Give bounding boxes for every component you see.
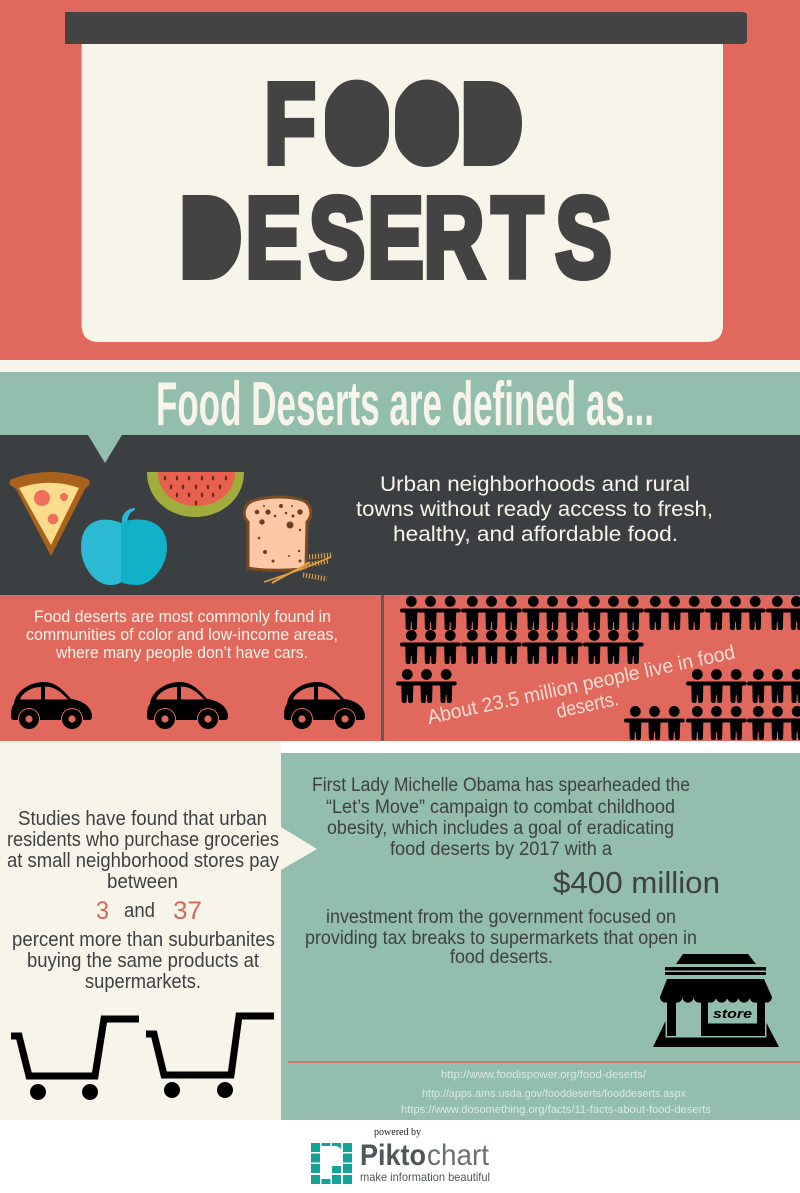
card lid bar <box>65 12 747 44</box>
grocery prices text: Studies have found that urban <box>18 808 267 830</box>
campaign text: First Lady Michelle Obama has spearheaded the <box>312 775 690 796</box>
campaign text: food deserts. <box>450 947 553 968</box>
icon: store <box>653 954 779 1047</box>
number: 37: 37 <box>173 897 202 925</box>
communities text <box>26 607 338 662</box>
icon: three cars <box>11 682 365 730</box>
wordmark <box>360 1139 490 1184</box>
communities text: communities of color and low-income areas, <box>26 625 338 644</box>
panel: people statistic <box>384 595 800 741</box>
grocery prices text: residents who purchase groceries <box>7 829 279 851</box>
icon: Piktochart logo <box>311 1143 352 1184</box>
sources: http://apps.ams.usda.gov/fooddeserts/fooddeserts.aspx <box>422 1088 686 1100</box>
campaign text: obesity, which includes a goal of eradicating <box>327 818 674 839</box>
icon: store: store <box>713 1006 752 1021</box>
panel: header <box>0 0 800 360</box>
wordmark: make information beautiful <box>360 1170 490 1184</box>
grocery prices text: buying the same products at <box>27 950 259 972</box>
definition text <box>356 473 713 546</box>
icon: shopping cart right <box>146 1016 274 1098</box>
panel: grocery prices <box>0 741 281 1120</box>
panel: Let's Move campaign <box>281 753 800 1120</box>
grocery prices text: and <box>124 900 155 922</box>
icon: bread with wheat <box>244 497 333 583</box>
campaign text: investment from the government focused on <box>326 907 676 928</box>
stat: $400 million: $400 million <box>553 865 720 900</box>
icon: apple <box>81 508 167 585</box>
wordmark: Pikto <box>360 1139 426 1172</box>
grocery prices text <box>7 808 279 993</box>
campaign text <box>305 775 697 968</box>
panel: definition <box>0 435 800 595</box>
icon: watermelon <box>147 472 244 517</box>
people statistic text: About 23.5 million people live in food <box>425 642 737 729</box>
sources: https://www.dosomething.org/facts/11-facts-about-food-deserts <box>401 1104 712 1116</box>
campaign text: “Let’s Move” campaign to combat childhood <box>326 797 675 818</box>
number: 3: 3 <box>96 897 109 925</box>
footer: Piktochart branding <box>0 1120 800 1193</box>
communities text: Food deserts are most commonly found in <box>34 607 331 626</box>
title: Food Deserts <box>180 61 611 302</box>
title: Food Deserts: DESERTS <box>180 175 611 302</box>
campaign text: providing tax breaks to supermarkets that open in <box>305 928 697 949</box>
grocery prices text: percent more than suburbanites <box>12 929 275 951</box>
definition text: towns without ready access to fresh, <box>356 498 713 521</box>
grocery prices text: at small neighborhood stores pay <box>7 850 279 872</box>
title: Food Deserts: FOOD <box>264 61 521 188</box>
definition text: Urban neighborhoods and rural <box>380 473 690 496</box>
sources <box>401 1069 712 1116</box>
panel: communities and cars <box>0 595 381 741</box>
communities text: where many people don’t have cars. <box>55 643 308 662</box>
icon: pizza slice <box>9 472 90 556</box>
wordmark: chart <box>427 1139 490 1172</box>
icon: shopping cart left <box>11 1019 139 1100</box>
pointer arrow <box>281 827 317 870</box>
people statistic text: deserts. <box>554 688 621 723</box>
panel: definition banner <box>0 370 800 439</box>
icon: rows of people <box>396 596 800 740</box>
grocery prices text: supermarkets. <box>85 971 201 993</box>
grocery prices text: between <box>107 871 178 893</box>
title card <box>82 40 723 342</box>
sources: http://www.foodispower.org/food-deserts/ <box>441 1069 647 1081</box>
definition text: healthy, and affordable food. <box>393 523 678 546</box>
campaign text: food deserts by 2017 with a <box>390 839 612 860</box>
powered by: powered by <box>374 1127 422 1138</box>
banner pointer <box>88 435 122 463</box>
